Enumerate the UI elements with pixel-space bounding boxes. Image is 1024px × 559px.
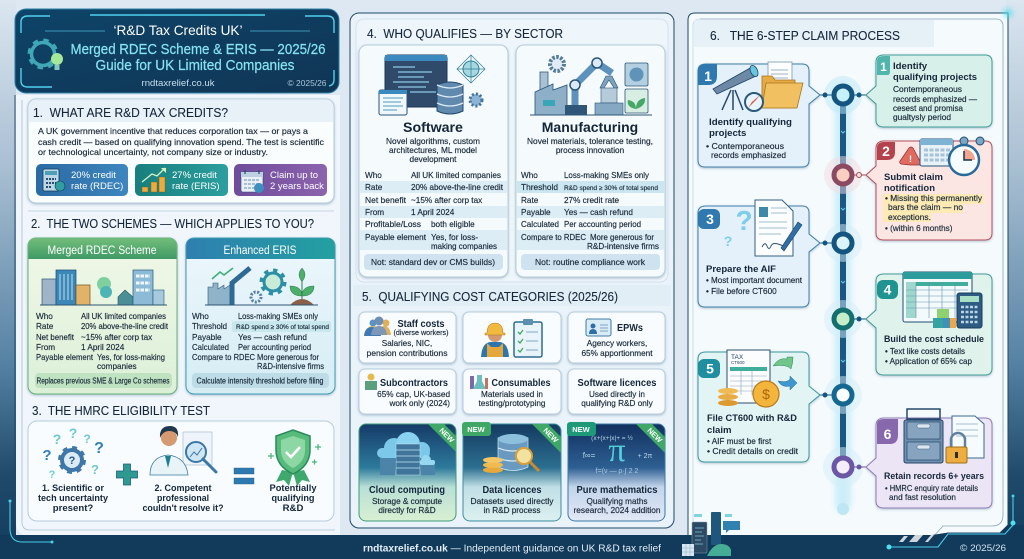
card title: Merged RDEC Scheme: [48, 245, 156, 257]
title: R&D Tax Credits UK: ‘R&D Tax Credits UK’: [114, 22, 242, 38]
details table: Who: [36, 312, 53, 321]
callout: [364, 254, 503, 270]
circuit decoration: bottom left: [8, 500, 54, 544]
callout: Not: standard dev or CMS builds): [371, 258, 495, 267]
icon: application form and pen: [724, 200, 802, 256]
callout: [192, 373, 329, 388]
card: software licences: Used directly in: [589, 390, 645, 399]
panel: six step claim process: [688, 9, 1012, 540]
label: uncertainty: present?: [53, 503, 93, 514]
icon: tax form, coins and arrows: $: [762, 386, 770, 402]
description: development: [410, 155, 457, 164]
node 4: [824, 300, 866, 338]
details table: Rate: [365, 183, 383, 192]
tag: new: NEW: [572, 425, 591, 434]
card: staff costs: (diverse workers): [394, 330, 448, 337]
details table: Net benefit: [36, 333, 75, 342]
icon: pi and formulas: f=(ν — ρ·∫ 2 2: [596, 468, 638, 475]
chip: 20% credit rate: [36, 164, 128, 196]
callout: Replaces previous SME & Large Co schemes: [36, 376, 170, 386]
label: result: R&D: [283, 503, 303, 514]
details table: From: [365, 208, 384, 217]
callout: [521, 254, 660, 270]
card: subcontractors: Subcontractors: [380, 378, 449, 389]
label: uncertainty: [38, 483, 109, 514]
icon: tax form, coins and arrows: [718, 350, 797, 407]
label: result: Potentially: [270, 483, 317, 494]
step bullets: records emphasized: [711, 151, 786, 160]
icon: shield badge: [268, 430, 321, 486]
step title: projects: [709, 128, 746, 139]
node 5: [820, 376, 862, 414]
node 3: [820, 224, 862, 262]
details table: 1 April 2024: [411, 208, 455, 217]
step 3 card: [698, 200, 820, 307]
card: data licences: Data licences: [482, 485, 542, 496]
icon: pi and formulas: [583, 432, 653, 475]
details table: R&D-intensive firms: [587, 242, 659, 251]
card title: Manufacturing: [542, 119, 638, 135]
subtitle: Guide for UK Limited Companies: [96, 58, 294, 74]
icon: gear with question marks: ?: [69, 425, 77, 441]
callout: Calculate intensity threshold before filing: [196, 376, 324, 386]
subtitle: Merged RDEC Scheme & ERIS — 2025/26: [70, 42, 326, 58]
details table: Payable element: [36, 353, 94, 362]
step 4 card: • Application of 65% cap: [885, 357, 972, 366]
icon: application form and pen: ?: [735, 205, 753, 236]
icon: pi and formulas: π: [608, 432, 626, 469]
details table: Per accounting period: [238, 343, 311, 352]
details table: All UK limited companies: [81, 312, 166, 321]
step 1 card: detail: records emphasized —: [893, 95, 978, 104]
step 2 card: • (within 6 months): [885, 224, 953, 233]
icon: warning, calendar and alarm clock: !: [909, 154, 912, 164]
card: worker illustration: [463, 312, 561, 363]
card title: Software: [403, 120, 463, 136]
description: process innovation: [556, 146, 625, 155]
step 5 card: • Credit details on credit: [707, 447, 799, 456]
details table: Threshold: [192, 322, 227, 331]
decoration: tech stack bottom centre: [682, 512, 740, 556]
icon: people: [364, 316, 391, 336]
card: EPWs: 65% apportionment: [581, 349, 653, 358]
highlighted warning: • Missing this permanently: [885, 194, 983, 203]
subtitle: [70, 42, 326, 74]
details table: Yes, for loss-: [431, 233, 478, 242]
step 3 card: 3: [706, 211, 714, 227]
chip: 27% credit rate: [135, 164, 228, 196]
details table: Calculated: [521, 220, 559, 229]
details table: ~15% after corp tax: [411, 196, 482, 205]
step 6 card: 6: [884, 426, 892, 442]
label: competent professional: 2. Competent: [154, 483, 212, 494]
description: [386, 137, 480, 164]
chip: claim up to 2 years back: 2 years back: [270, 181, 324, 192]
step 5 card: claim: [707, 425, 732, 436]
icon: pi and formulas: (x+(x+|x|+ = ½: [591, 434, 633, 442]
footer text: rndtaxrelief.co.uk — Independent guidance on UK R&D tax relief: [363, 542, 661, 554]
card: EPWs: EPWs: [617, 323, 644, 334]
card: EPWs: Agency workers,: [587, 339, 647, 348]
card: pure mathematics: [567, 420, 670, 521]
icon: telescope and folder: [713, 62, 803, 111]
step title: Identify qualifying: [709, 117, 792, 128]
details table: [36, 312, 169, 371]
details table: Who: [192, 312, 209, 321]
footer copyright: © 2025/26: [960, 543, 1006, 554]
heading 6: 6. THE 6-STEP CLAIM PROCESS: [710, 28, 900, 43]
ribbon: new: NEW: [541, 426, 561, 445]
chip: 20% credit rate: 20% credit: [71, 170, 116, 181]
icon: code window and database: [379, 55, 485, 115]
step 5 card: 5: [706, 360, 714, 376]
card: staff costs: Salaries, NIC,: [382, 339, 432, 348]
step 3 card: • Most important document: [706, 276, 803, 285]
callout: Not: routine compliance work: [535, 258, 646, 267]
step 3 card: • File before CT600: [706, 287, 777, 296]
icon: pi and formulas: f∞=: [583, 451, 596, 460]
step 4 card: [866, 272, 992, 375]
details table: Compare to RDEC: [521, 233, 586, 242]
details table: All UK limited companies: [411, 171, 501, 180]
step 1 card: detail: Identify: [893, 61, 928, 72]
heading 1: 1. WHAT ARE R&D TAX CREDITS?: [33, 105, 228, 120]
panel: merged RDEC scheme: [28, 238, 177, 394]
step 6 card: [866, 409, 992, 508]
details table: Rate: [36, 322, 54, 331]
step 2 card: notification: [884, 183, 935, 194]
details table: Calculated: [192, 343, 229, 352]
details table: 27% credit rate: [564, 196, 620, 205]
step 3 card: Prepare the AIF: [706, 264, 776, 275]
details table: Threshold: [521, 183, 558, 192]
step bullets: [706, 142, 786, 160]
heading 3: 3. THE HMRC ELIGIBILITY TEST: [32, 403, 210, 418]
chip: 27% credit rate: rate (ERIS): [172, 181, 220, 192]
panel: HMRC eligibility test: [28, 421, 334, 521]
details table: Loss-making SMEs only: [564, 171, 650, 180]
icon: industry and growth: [205, 268, 318, 305]
footer bar: [0, 525, 1024, 559]
step 6 card: and fast resolution: [889, 493, 956, 502]
description: Novel algorithms, custom: [386, 137, 480, 146]
details table: Who: [365, 171, 382, 180]
icon: gear with question marks: ?: [94, 440, 104, 457]
website: rndtaxrelief.co.uk: [142, 78, 215, 88]
icon: database and magnifier: [483, 434, 539, 473]
details table: R&D spend ≥ 30% of total spend: [236, 324, 329, 331]
icon: tax form, coins and arrows: CT600: [731, 360, 745, 365]
step 4 card: • Text like costs details: [885, 347, 965, 356]
details table: Rate: [521, 196, 539, 205]
card: consumables: Consumables: [492, 378, 551, 389]
details table: [192, 312, 331, 371]
step 4 card: Build the cost schedule: [884, 334, 984, 345]
step 6 card: Retain records 6+ years: [884, 471, 984, 482]
step 1 card: illustration: 1: [704, 68, 712, 84]
details table: Compare to RDEC: [192, 353, 255, 362]
card: cloud computing: Storage & compute: [372, 497, 442, 506]
icon: gear with question marks: ?: [49, 469, 56, 481]
step 5 card: • AIF must be first: [707, 437, 772, 446]
circuit decoration: bottom right: [886, 494, 1016, 550]
step 6 card: • HMRC enquiry rate details: [885, 484, 978, 493]
details table: companies: [97, 362, 137, 371]
step 1 card: detail: Contemporaneous: [893, 85, 962, 94]
details table: ~15% after corp tax: [81, 333, 152, 342]
description text: [38, 127, 324, 157]
step 1 card: detail: 1: [880, 60, 887, 74]
step 1 card: detail: qualifying projects: [893, 72, 977, 83]
label: result: qualifying: [272, 493, 315, 504]
card: data licences: in R&D process: [484, 506, 540, 515]
panel: what are R&D tax credits: [28, 99, 334, 203]
icon: application form and pen: ?: [724, 233, 732, 249]
card: subcontractors: [359, 369, 456, 414]
card: subcontractors: work only (2024): [388, 399, 450, 408]
ribbon: new: NEW: [645, 426, 665, 445]
card: staff costs: Staff costs: [398, 319, 445, 330]
card: staff costs: [359, 312, 456, 363]
step 2 card: Submit claim: [884, 172, 943, 183]
card: consumables: testing/prototyping: [479, 399, 546, 408]
card: consumables: [463, 369, 561, 414]
details table: R&D-intensive firms: [257, 362, 324, 371]
card: staff costs: pension contributions: [366, 349, 448, 358]
details table: R&D spend ≥ 30% of total spend: [564, 185, 658, 192]
card: consumables: Materials used in: [481, 390, 543, 399]
left column background: [16, 95, 340, 537]
description: Novel materials, tolerance testing,: [527, 137, 653, 146]
label: result: [270, 483, 317, 514]
heading 4: 4. WHO QUALIFIES — BY SECTOR: [367, 26, 563, 41]
icon: plus: [116, 464, 138, 485]
copyright: © 2025/26: [288, 78, 327, 88]
details table: 20% above-the-line credit: [411, 183, 504, 192]
step bullets: • Contemporaneous: [706, 142, 784, 151]
details table: More generous for: [590, 233, 654, 242]
step 5 card: [698, 350, 820, 462]
card: cloud computing: Cloud computing: [369, 485, 445, 496]
card: software licences: qualifying R&D only: [581, 399, 654, 408]
card: EPWs: [568, 312, 665, 363]
card: pure mathematics: research, 2024 addition: [574, 506, 661, 515]
icon: gear and lightbulb: [30, 41, 63, 70]
heading 2: 2. THE TWO SCHEMES — WHICH APPLIES TO YOU?: [31, 216, 314, 231]
label: uncertainty: 1. Scientific or: [42, 483, 104, 494]
highlighted warning: bars the claim — no: [888, 203, 963, 212]
panel: who qualifies and cost categories: [350, 13, 674, 528]
step 5 card: File CT600 with R&D: [707, 413, 797, 424]
chip: 20% credit rate: rate (RDEC): [71, 181, 123, 192]
step 2 card: 2: [882, 143, 890, 159]
card: software licences: Software licences: [578, 378, 657, 389]
chip: claim up to 2 years back: Claim up to: [270, 170, 318, 181]
description: architectures, ML model: [389, 146, 477, 155]
details table: 20% above-the-line credit: [81, 322, 169, 331]
chip: 27% credit rate: 27% credit: [172, 170, 217, 181]
icon: office buildings: [40, 270, 167, 305]
icon: filing cabinet, documents and lock: [904, 409, 984, 463]
details table: Profitable/Loss: [365, 220, 421, 229]
label: competent professional: professional: [157, 493, 209, 504]
icon: gear with question marks: ?: [53, 431, 61, 447]
details table: Yes — cash refund: [238, 333, 307, 342]
card: pure mathematics: Pure mathematics: [576, 485, 658, 496]
details table: More generous for: [257, 353, 319, 362]
icon: gear with question marks: ?: [91, 462, 99, 477]
details table: making companies: [431, 242, 497, 251]
timeline: [820, 76, 866, 515]
highlighted warning: exceptions.: [888, 213, 931, 222]
node 2: [824, 156, 866, 194]
details table: Who: [521, 171, 538, 180]
details table: Per accounting period: [564, 220, 641, 229]
icon: factory and robot arm: [530, 57, 652, 115]
callout: [35, 373, 172, 388]
icon: equals: [234, 468, 254, 484]
card: software: [359, 45, 508, 277]
card: manufacturing: [516, 45, 665, 277]
icon: gear with question marks: ?: [42, 447, 52, 464]
node 1: [820, 76, 866, 114]
heading 6: [694, 20, 934, 47]
icon: tax form, coins and arrows: TAX: [731, 354, 744, 361]
card: data licences: Datasets used directly: [470, 497, 554, 506]
card: data licences: [462, 420, 566, 521]
card: cloud computing: directly for R&D: [378, 506, 436, 515]
chip: claim up to 2 years back: [234, 164, 327, 196]
card: subcontractors: 65% cap, UK-based: [377, 390, 450, 399]
icon: gear with question marks: ?: [83, 432, 91, 446]
card: pure mathematics: Qualifying maths: [587, 497, 647, 506]
highlighted warning: [883, 194, 984, 222]
icon: gear with question marks: ?: [69, 455, 76, 467]
header banner: [15, 9, 339, 93]
card: software licences: [568, 369, 665, 414]
tag: new: NEW: [467, 425, 486, 434]
description text: cash credit — based on qualifying innovation spend. The test is scientific: [38, 138, 324, 147]
details table: both eligible: [431, 220, 475, 229]
card: cloud computing: [359, 420, 462, 521]
icon: professional with magnifier: [150, 426, 216, 475]
node 6: [823, 447, 866, 487]
ribbon: new: NEW: [437, 426, 457, 445]
details table: Yes — cash refund: [564, 208, 633, 217]
label: uncertainty: tech uncertainty: [38, 493, 109, 504]
details table: Payable: [521, 208, 551, 217]
step 1 card: detail: gualtysly period: [893, 113, 951, 122]
details table: Payable element: [365, 233, 427, 242]
details table: From: [36, 343, 55, 352]
details table: Loss-making SMEs only: [238, 312, 319, 321]
step 4 card: 4: [884, 282, 892, 298]
label: competent professional: couldn't resolve it?: [142, 503, 224, 514]
step 1 card: detail: cesest and promisa: [893, 104, 963, 113]
details table: Net benefit: [365, 196, 407, 205]
details table: [517, 171, 664, 251]
card title: Enhanced ERIS: [224, 245, 297, 257]
icon: pi and formulas: + 2π: [638, 453, 653, 460]
step title: [709, 117, 792, 139]
step 2 card: [866, 137, 992, 240]
step 1 card: illustration: [698, 62, 820, 167]
heading 5: [353, 285, 671, 306]
icon: spreadsheet and calculator: [903, 272, 982, 328]
details table: [360, 171, 507, 251]
label: competent professional: [142, 483, 224, 514]
details table: 1 April 2024: [81, 343, 125, 352]
panel: enhanced ERIS: [186, 238, 335, 394]
step 1 card: detail: [866, 55, 992, 127]
icon: cloud servers: [377, 432, 435, 475]
heading 5: 5. QUALIFYING COST CATEGORIES (2025/26): [362, 289, 618, 304]
icon: gear with question marks: [42, 425, 104, 481]
description text: or technological uncertainty, not company size or industry.: [38, 148, 268, 157]
details table: Payable: [192, 333, 222, 342]
description: [527, 137, 653, 155]
details table: Yes, for loss-making: [97, 353, 165, 362]
description text: A UK government incentive that reduces corporation tax — or pays a: [38, 127, 308, 136]
